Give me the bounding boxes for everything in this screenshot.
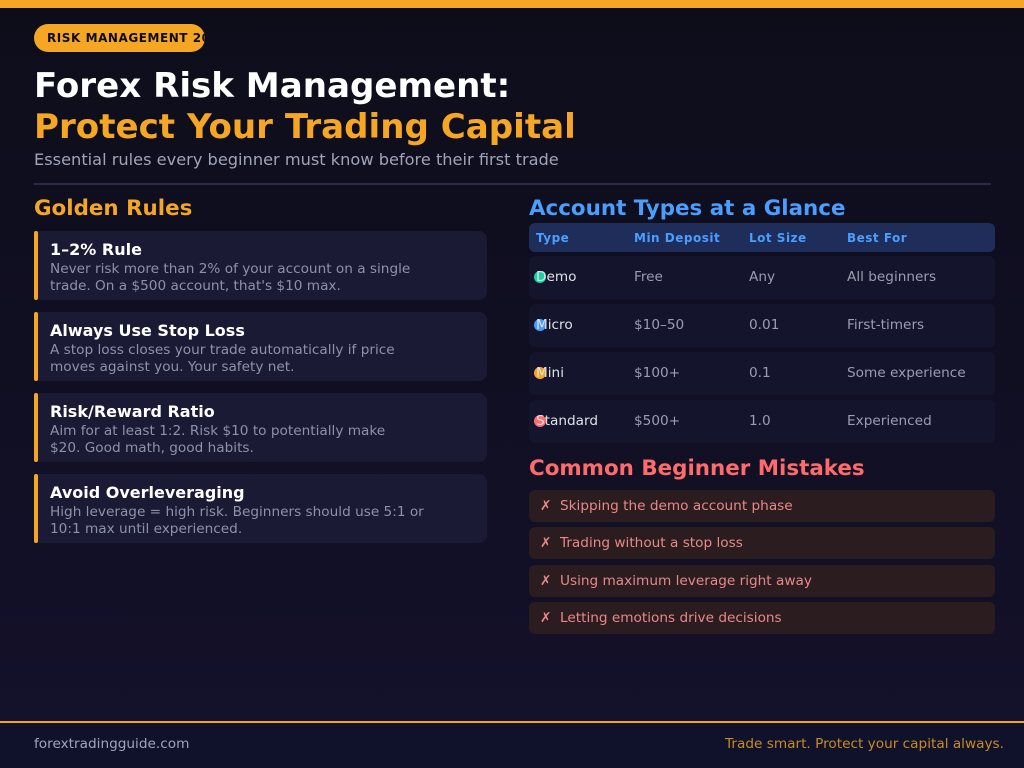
mistake 3: [529, 565, 995, 597]
row: standard: Standard: [536, 413, 598, 429]
table header: Best For: [847, 231, 907, 245]
mistake 4: Letting emotions drive decisions: [560, 610, 782, 626]
mistake 3: Using maximum leverage right away: [560, 573, 812, 589]
row: micro: 0.01: [749, 317, 779, 333]
mistake 2: Trading without a stop loss: [560, 535, 743, 551]
row: standard: 1.0: [749, 413, 771, 429]
card: stop loss: [34, 312, 487, 381]
mistake 2: [529, 527, 995, 559]
mistake 4: ✗: [540, 610, 551, 626]
card: risk reward: Risk/Reward Ratio: [50, 402, 215, 421]
row: mini: Some experience: [847, 365, 966, 381]
row: standard: Experienced: [847, 413, 932, 429]
table header: [529, 223, 995, 252]
card: risk reward: Aim for at least 1:2. Risk $10 to potentially make: [50, 423, 385, 439]
row: demo: Demo: [536, 269, 577, 285]
row: mini: [529, 352, 995, 395]
table header: Min Deposit: [634, 231, 720, 245]
mistake 2: ✗: [540, 535, 551, 551]
footer: [0, 721, 1024, 768]
card: overleveraging: 10:1 max until experienced.: [50, 521, 242, 537]
row: demo: Any: [749, 269, 775, 285]
row: micro: First-timers: [847, 317, 924, 333]
row: demo: All beginners: [847, 269, 936, 285]
row: demo: Free: [634, 269, 663, 285]
card: stop loss: A stop loss closes your trade automatically if price: [50, 342, 395, 358]
mistake 1: [529, 490, 995, 522]
heading: account types: Account Types at a Glance: [529, 196, 845, 221]
footer tagline: Trade smart. Protect your capital always.: [725, 736, 1004, 752]
heading: mistakes: Common Beginner Mistakes: [529, 456, 865, 481]
badge: [34, 24, 205, 52]
mistake 1: Skipping the demo account phase: [560, 498, 793, 514]
title: Forex Risk Management:: [34, 66, 510, 106]
card: 1-2% rule: Never risk more than 2% of your account on a single: [50, 261, 410, 277]
card: 1-2% rule: trade. On a $500 account, that's $10 max.: [50, 278, 341, 294]
card: risk reward: $20. Good math, good habits.: [50, 440, 254, 456]
row: micro: Micro: [536, 317, 573, 333]
card: 1-2% rule: 1–2% Rule: [50, 240, 142, 259]
row: micro: [529, 304, 995, 347]
card: stop loss: moves against you. Your safety net.: [50, 359, 294, 375]
card: overleveraging: Avoid Overleveraging: [50, 483, 245, 502]
card: overleveraging: High leverage = high risk. Beginners should use 5:1 or: [50, 504, 424, 520]
heading: golden rules: Golden Rules: [34, 196, 192, 221]
table header: Lot Size: [749, 231, 807, 245]
mistake 4: [529, 602, 995, 634]
card: risk reward: [34, 393, 487, 462]
title: [34, 66, 576, 147]
card: stop loss: Always Use Stop Loss: [50, 321, 245, 340]
row: mini: 0.1: [749, 365, 771, 381]
mistake 3: ✗: [540, 573, 551, 589]
table header: Type: [536, 231, 569, 245]
top accent bar: [0, 0, 1024, 8]
card: overleveraging: [34, 474, 487, 543]
row: mini: Mini: [536, 365, 564, 381]
mistake 1: ✗: [540, 498, 551, 514]
row: micro: $10–50: [634, 317, 684, 333]
footer site: forextradingguide.com: [34, 736, 189, 752]
row: standard: $500+: [634, 413, 680, 429]
title: Protect Your Trading Capital: [34, 107, 576, 147]
row: mini: $100+: [634, 365, 680, 381]
subtitle: Essential rules every beginner must know before their first trade: [34, 150, 559, 169]
row: demo: [529, 256, 995, 299]
card: 1-2% rule: [34, 231, 487, 300]
row: standard: [529, 400, 995, 443]
